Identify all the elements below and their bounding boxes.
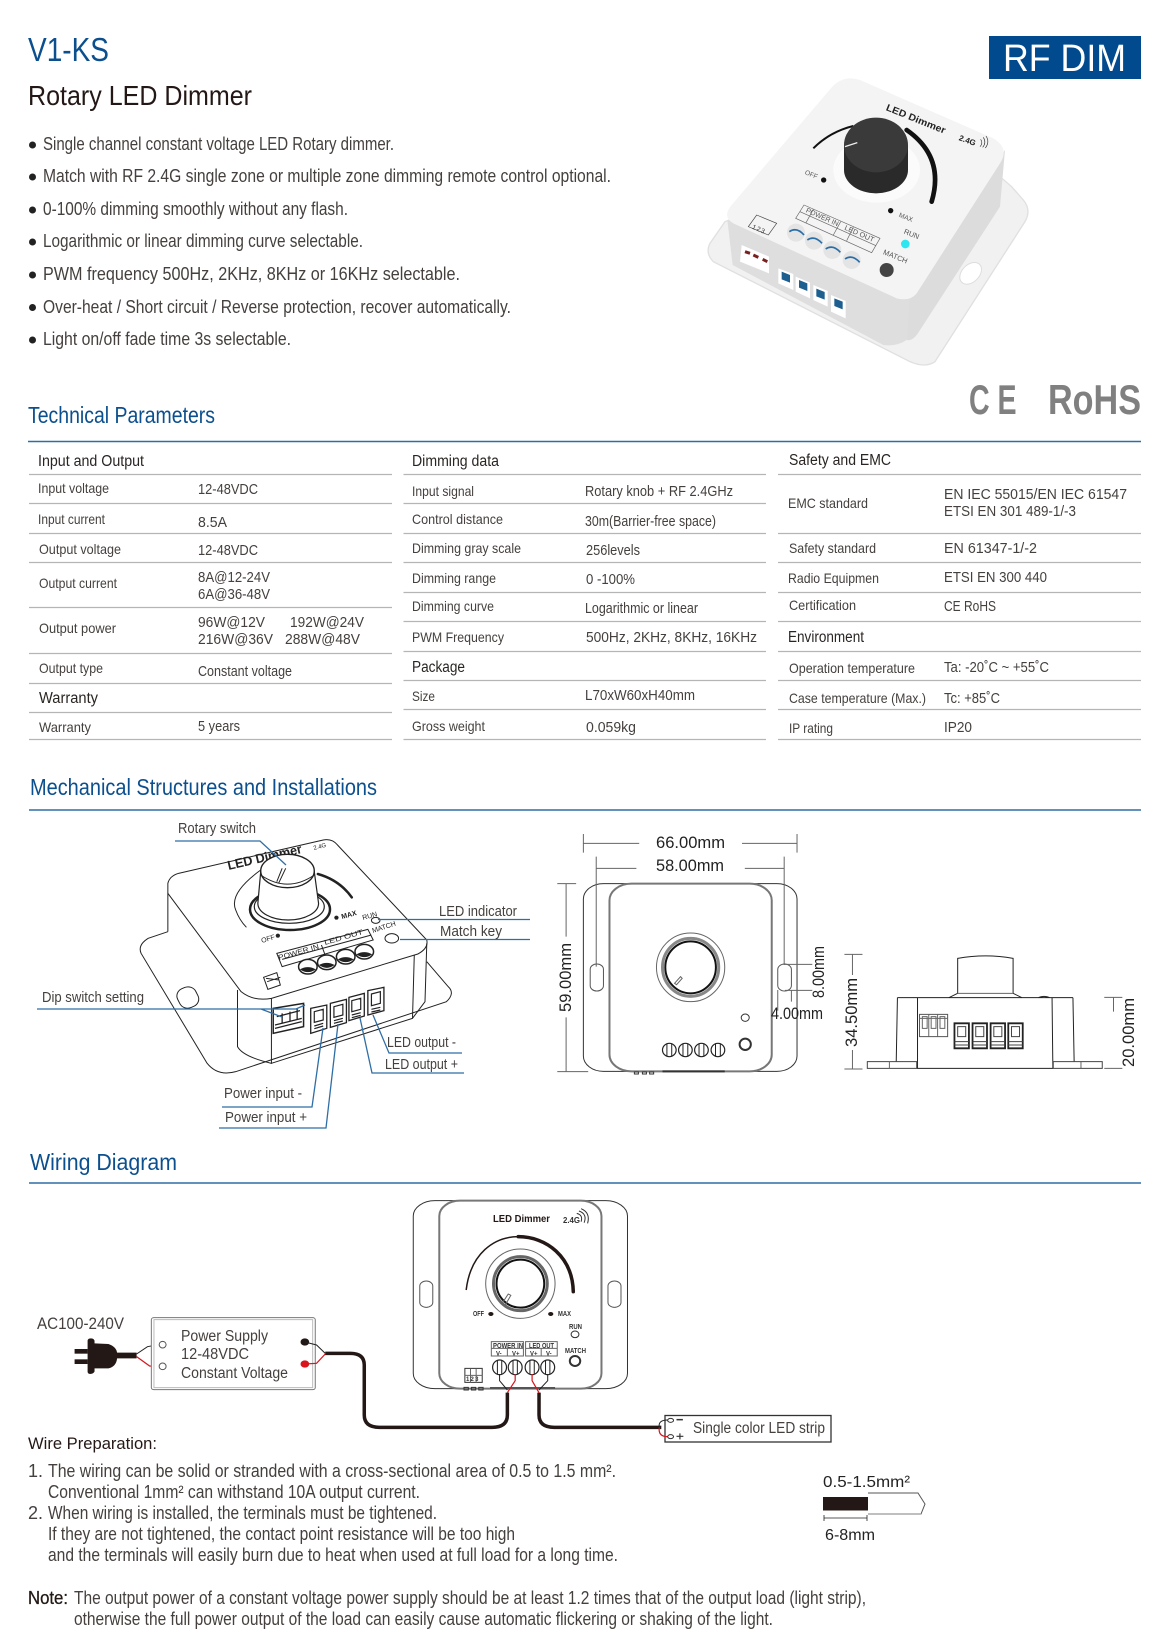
row: EMC standard: EMC standard <box>788 495 868 511</box>
labels on dimmer front view: RUN <box>569 1324 582 1331</box>
heading: environment: Environment <box>788 629 865 646</box>
row: safety standard: EN 61347-1/-2 <box>944 541 1037 557</box>
callout: rotary switch: Rotary switch <box>178 820 256 837</box>
product photo: white dimmer with black knob <box>708 78 1028 365</box>
row: gross weight: 0.059kg <box>586 720 636 736</box>
row: EMC standard <box>788 487 1127 520</box>
labels on dimmer front view: POWER IN <box>493 1343 523 1350</box>
feature bullet list: Over-heat / Short circuit / Reverse protection, recover automatically. <box>43 297 511 317</box>
row: output type: Constant voltage <box>198 664 292 680</box>
certification logos: CE and RoHS: CE <box>969 375 1017 423</box>
feature bullet list: PWM frequency 500Hz, 2KHz, 8KHz or 16KHz selectable. <box>43 264 460 284</box>
row: dimming range: Dimming range <box>412 570 496 586</box>
single color LED strip: Single color LED strip <box>693 1420 825 1437</box>
badge: RF DIM: RF DIM <box>1003 38 1126 80</box>
row: input current <box>38 511 227 531</box>
wire preparation instructions: The wiring can be solid or stranded with a cross-sectional area of 0.5 to 1.5 mm². <box>48 1461 616 1481</box>
row: safety standard <box>789 540 1037 557</box>
row: IP rating <box>789 720 972 736</box>
line drawing: dimmer in isometric view: LED Dimmer <box>226 841 303 873</box>
callout: power input minus: Power input - <box>224 1085 302 1102</box>
row: output power <box>39 615 364 648</box>
wire strip illustration: 0.5-1.5mm² <box>823 1474 911 1491</box>
wire preparation instructions: 1. <box>28 1461 43 1481</box>
row: operation temperature: Ta: -20˚C ~ +55˚C <box>944 660 1049 676</box>
labels on dimmer front view: V- <box>546 1352 552 1358</box>
labels on dimmer front view: 2.4G <box>563 1216 580 1225</box>
wire preparation instructions: Conventional 1mm² can withstand 10A output current. <box>48 1482 420 1502</box>
dimension lines: front view <box>557 834 812 1072</box>
small text on drawing: LED OUT <box>324 929 365 947</box>
callout: LED output minus: LED output - <box>387 1034 456 1051</box>
callout: LED output plus: LED output + <box>385 1056 458 1073</box>
single color LED strip <box>659 1416 831 1442</box>
row: PWM frequency: 500Hz, 2KHz, 8KHz, 16KHz <box>586 630 757 646</box>
dimension labels: front view: 66.00mm <box>656 834 725 852</box>
dimension labels: front view: 8.00mm <box>810 946 828 998</box>
labels on dimmer front view: V+ <box>530 1352 538 1358</box>
cables: power and output <box>325 1353 661 1427</box>
callout: LED output plus <box>360 1018 464 1073</box>
product photo: white dimmer with black knob: 123 <box>751 224 767 236</box>
row: warranty: 5 years <box>198 719 240 735</box>
wire strip illustration <box>823 1474 925 1544</box>
row: input signal: Input signal <box>412 483 474 499</box>
heading: mechanical structures: Mechanical Structures and Installations <box>30 774 377 800</box>
product photo: white dimmer with black knob: 2.4G <box>958 133 977 148</box>
row: safety standard: Safety standard <box>789 540 876 556</box>
labels on dimmer front view: V- <box>496 1352 502 1358</box>
row: operation temperature: Operation temperature <box>789 660 915 676</box>
row: control distance: 30m(Barrier-free space) <box>585 514 716 530</box>
labels on dimmer front view: LED Dimmer <box>493 1214 550 1225</box>
row: dimming curve: Logarithmic or linear <box>585 601 698 617</box>
certification logos: CE and RoHS <box>969 375 1141 423</box>
row: radio equipment: Radio Equipmen <box>788 570 879 586</box>
dimension labels: front view <box>557 834 828 1023</box>
row: dimming range <box>412 570 635 588</box>
small text on drawing: RUN <box>362 911 378 922</box>
wire preparation instructions: When wiring is installed, the terminals must be tightened. <box>48 1503 437 1523</box>
wire strip illustration: 6-8mm <box>825 1527 875 1544</box>
heading: wiring diagram: Wiring Diagram <box>30 1149 177 1175</box>
heading: input and output: Input and Output <box>38 453 145 470</box>
row: case temperature <box>789 690 1000 707</box>
labels on dimmer front view: V+ <box>512 1352 520 1358</box>
callout: LED indicator: LED indicator <box>439 903 517 920</box>
heading: package: Package <box>412 659 465 676</box>
row: radio equipment: ETSI EN 300 440 <box>944 570 1047 586</box>
small text on drawing: OFF <box>261 934 276 945</box>
callout: power input plus <box>219 1024 338 1128</box>
row: EMC standard: ETSI EN 301 489-1/-3 <box>944 504 1076 520</box>
product photo: white dimmer with black knob: MAX <box>898 212 914 224</box>
labels on dimmer front view <box>466 1214 586 1383</box>
row: gross weight <box>412 718 636 736</box>
certification logos: CE and RoHS: RoHS <box>1048 376 1141 423</box>
power supply box: 12-48VDC <box>181 1346 249 1363</box>
note: The output power of a constant voltage power supply should be at least 1.2 times that of the output load (light strip), <box>74 1588 866 1608</box>
row: output power: 216W@36V <box>198 632 273 648</box>
product photo: white dimmer with black knob: OFF <box>804 169 819 181</box>
row: control distance <box>412 511 716 530</box>
dimension labels: front view: 59.00mm <box>557 943 575 1012</box>
labels on dimmer front view: 123 <box>466 1377 480 1383</box>
row: input current: Input current <box>38 511 105 527</box>
labels on dimmer front view: MAX <box>558 1311 571 1318</box>
feature bullet list: 0-100% dimming smoothly without any flash. <box>43 199 348 219</box>
row: output current: 8A@12-24V <box>198 570 270 586</box>
labels on dimmer front view: LED OUT <box>529 1343 555 1350</box>
heading: safety and EMC: Safety and EMC <box>789 452 891 469</box>
dimension labels: front view: 58.00mm <box>656 857 724 875</box>
row: input voltage: 12-48VDC <box>198 482 258 498</box>
row: dimming range: 0 -100% <box>586 572 635 588</box>
small text on drawing: 2.4G <box>313 843 327 852</box>
dimension labels: side view: 34.50mm <box>843 978 861 1047</box>
row: input signal <box>412 483 733 500</box>
label: AC input: AC100-240V <box>37 1314 125 1333</box>
feature bullet list: Light on/off fade time 3s selectable. <box>43 329 291 349</box>
row: PWM frequency: PWM Frequency <box>412 629 504 645</box>
callout: LED output minus <box>373 1015 462 1053</box>
row: output power: Output power <box>39 620 116 636</box>
dimension drawing: front view <box>583 884 797 1074</box>
row: control distance: Control distance <box>412 511 503 527</box>
row: certification <box>789 597 996 615</box>
table: dimming data, package <box>412 453 757 736</box>
callout: match key <box>400 923 530 940</box>
heading: warranty: Warranty <box>39 690 98 707</box>
row: warranty: Warranty <box>39 719 91 735</box>
row: gross weight: Gross weight <box>412 718 485 734</box>
callout: dip switch setting <box>37 989 305 1017</box>
row: output type: Output type <box>39 660 103 676</box>
feature bullet list <box>29 134 611 349</box>
table: input and output, warranty <box>38 453 364 735</box>
small text on drawing: MATCH <box>371 921 397 935</box>
wire preparation instructions: and the terminals will easily burn due to heat when used at full load for a long time. <box>48 1545 618 1565</box>
row: case temperature: Case temperature (Max.) <box>789 690 926 706</box>
small text on drawing: POWER IN <box>278 944 320 962</box>
callout: rotary switch <box>175 820 286 865</box>
row: output voltage: 12-48VDC <box>198 543 258 559</box>
row: EMC standard: EN IEC 55015/EN IEC 61547 <box>944 487 1127 503</box>
row: certification: Certification <box>789 597 856 613</box>
row: warranty <box>39 719 240 735</box>
product photo: white dimmer with black knob: POWER IN <box>805 207 839 228</box>
power supply box <box>151 1318 325 1390</box>
dimension drawing: side view <box>844 954 1122 1069</box>
wire preparation instructions <box>28 1461 618 1565</box>
row: output voltage <box>39 541 258 559</box>
wire preparation instructions: If they are not tightened, the contact point resistance will be too high <box>48 1524 515 1544</box>
power supply box: Power Supply <box>181 1328 268 1345</box>
row: output current: 6A@36-48V <box>198 587 270 603</box>
row: size: L70xW60xH40mm <box>585 688 695 704</box>
dimension labels: front view: 4.00mm <box>771 1005 823 1023</box>
row: certification: CE RoHS <box>944 599 996 615</box>
labels on dimmer front view: MATCH <box>565 1348 586 1355</box>
row: output type <box>39 660 292 680</box>
heading: technical parameters: Technical Parameters <box>28 402 215 428</box>
row: operation temperature <box>789 660 1049 676</box>
row: case temperature: Tc: +85˚C <box>944 691 1000 707</box>
power supply box: Constant Voltage <box>181 1365 288 1382</box>
dimension labels: side view: 20.00mm <box>1120 998 1138 1067</box>
row: dimming gray scale <box>412 540 640 559</box>
row: input signal: Rotary knob + RF 2.4GHz <box>585 484 733 500</box>
row: input voltage <box>38 480 258 498</box>
feature bullet list: Single channel constant voltage LED Rotary dimmer. <box>43 134 394 154</box>
row: input current: 8.5A <box>198 515 227 531</box>
row: IP rating: IP20 <box>944 720 972 736</box>
feature bullet list: Logarithmic or linear dimming curve selectable. <box>43 231 363 251</box>
row: PWM frequency <box>412 629 757 646</box>
row: output current <box>39 570 270 603</box>
icon: mains plug and AC wires <box>75 1338 158 1374</box>
row: size <box>412 688 695 704</box>
header: subtitle: Rotary LED Dimmer <box>28 80 252 111</box>
wire preparation instructions: 2. <box>28 1503 43 1523</box>
note: Note: <box>28 1588 68 1608</box>
labels on dimmer front view: OFF <box>473 1311 485 1318</box>
header: product title: V1-KS <box>28 31 109 68</box>
row: output voltage: Output voltage <box>39 541 121 557</box>
row: dimming curve <box>412 598 698 617</box>
row: output current: Output current <box>39 575 117 591</box>
row: dimming gray scale: 256levels <box>586 543 640 559</box>
row: dimming curve: Dimming curve <box>412 598 494 614</box>
callout: power input plus: Power input + <box>225 1109 307 1126</box>
feature bullet list: Match with RF 2.4G single zone or multiple zone dimming remote control optional. <box>43 166 611 186</box>
callout: match key: Match key <box>440 923 502 940</box>
note: otherwise the full power output of the load can easily cause automatic flickering or shaking of the light. <box>74 1609 773 1629</box>
product photo: white dimmer with black knob: LED OUT <box>843 225 876 244</box>
product photo: white dimmer with black knob: RUN <box>903 227 921 241</box>
row: dimming gray scale: Dimming gray scale <box>412 540 521 556</box>
line drawing: dimmer in isometric view <box>140 840 451 1073</box>
note <box>28 1588 866 1629</box>
row: output power: 96W@12V <box>198 615 265 631</box>
dimension labels: side view <box>843 978 1138 1067</box>
row: input voltage: Input voltage <box>38 480 109 496</box>
table: safety and EMC, environment <box>788 452 1127 736</box>
heading: wire preparation: Wire Preparation: <box>28 1434 157 1453</box>
callout: power input minus <box>222 1028 323 1107</box>
small text on drawing: MAX <box>341 910 358 921</box>
row: output power: 288W@48V <box>285 632 360 648</box>
callout: dip switch setting: Dip switch setting <box>42 989 144 1006</box>
row: radio equipment <box>788 570 1047 586</box>
row: IP rating: IP rating <box>789 720 833 736</box>
product photo: white dimmer with black knob: MATCH <box>882 248 909 265</box>
row: size: Size <box>412 688 435 704</box>
wiring drawing: dimmer front view <box>413 1201 627 1393</box>
heading: dimming data: Dimming data <box>412 453 499 470</box>
small text on drawing <box>261 843 397 962</box>
row: output power: 192W@24V <box>290 615 364 631</box>
product photo: white dimmer with black knob: LED Dimmer <box>884 103 947 137</box>
